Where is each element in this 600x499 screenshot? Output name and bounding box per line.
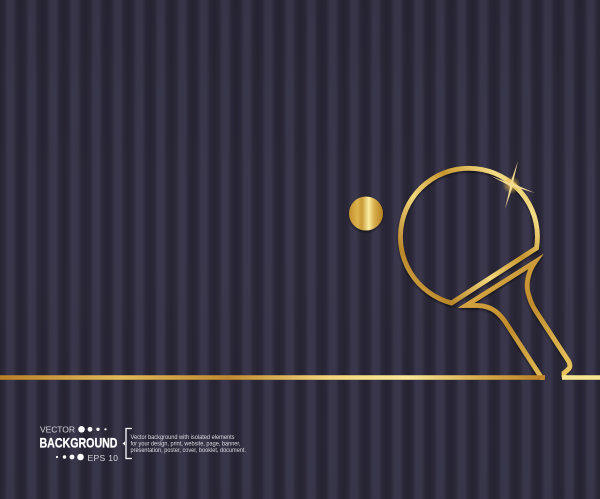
label: vector: VECTOR xyxy=(40,424,75,434)
description text: presentation, poster, cover, booklet, document. xyxy=(130,448,246,454)
description text: for your design, print, website, page, banner, xyxy=(130,442,241,448)
dots: top row xyxy=(78,426,107,433)
icon: table tennis ball xyxy=(349,196,383,230)
icon: paddle head xyxy=(400,168,537,303)
bracket xyxy=(122,428,132,458)
label: background: BACKGROUND xyxy=(40,434,118,450)
icon: paddle handle and baseline xyxy=(0,262,600,380)
description text xyxy=(130,435,246,454)
logo: vector background xyxy=(40,424,246,463)
description text: Vector background with isolated elements xyxy=(130,435,234,441)
label: eps 10: EPS 10 xyxy=(88,453,118,463)
dots: bottom row xyxy=(56,454,84,460)
icon: sparkle xyxy=(491,161,535,209)
